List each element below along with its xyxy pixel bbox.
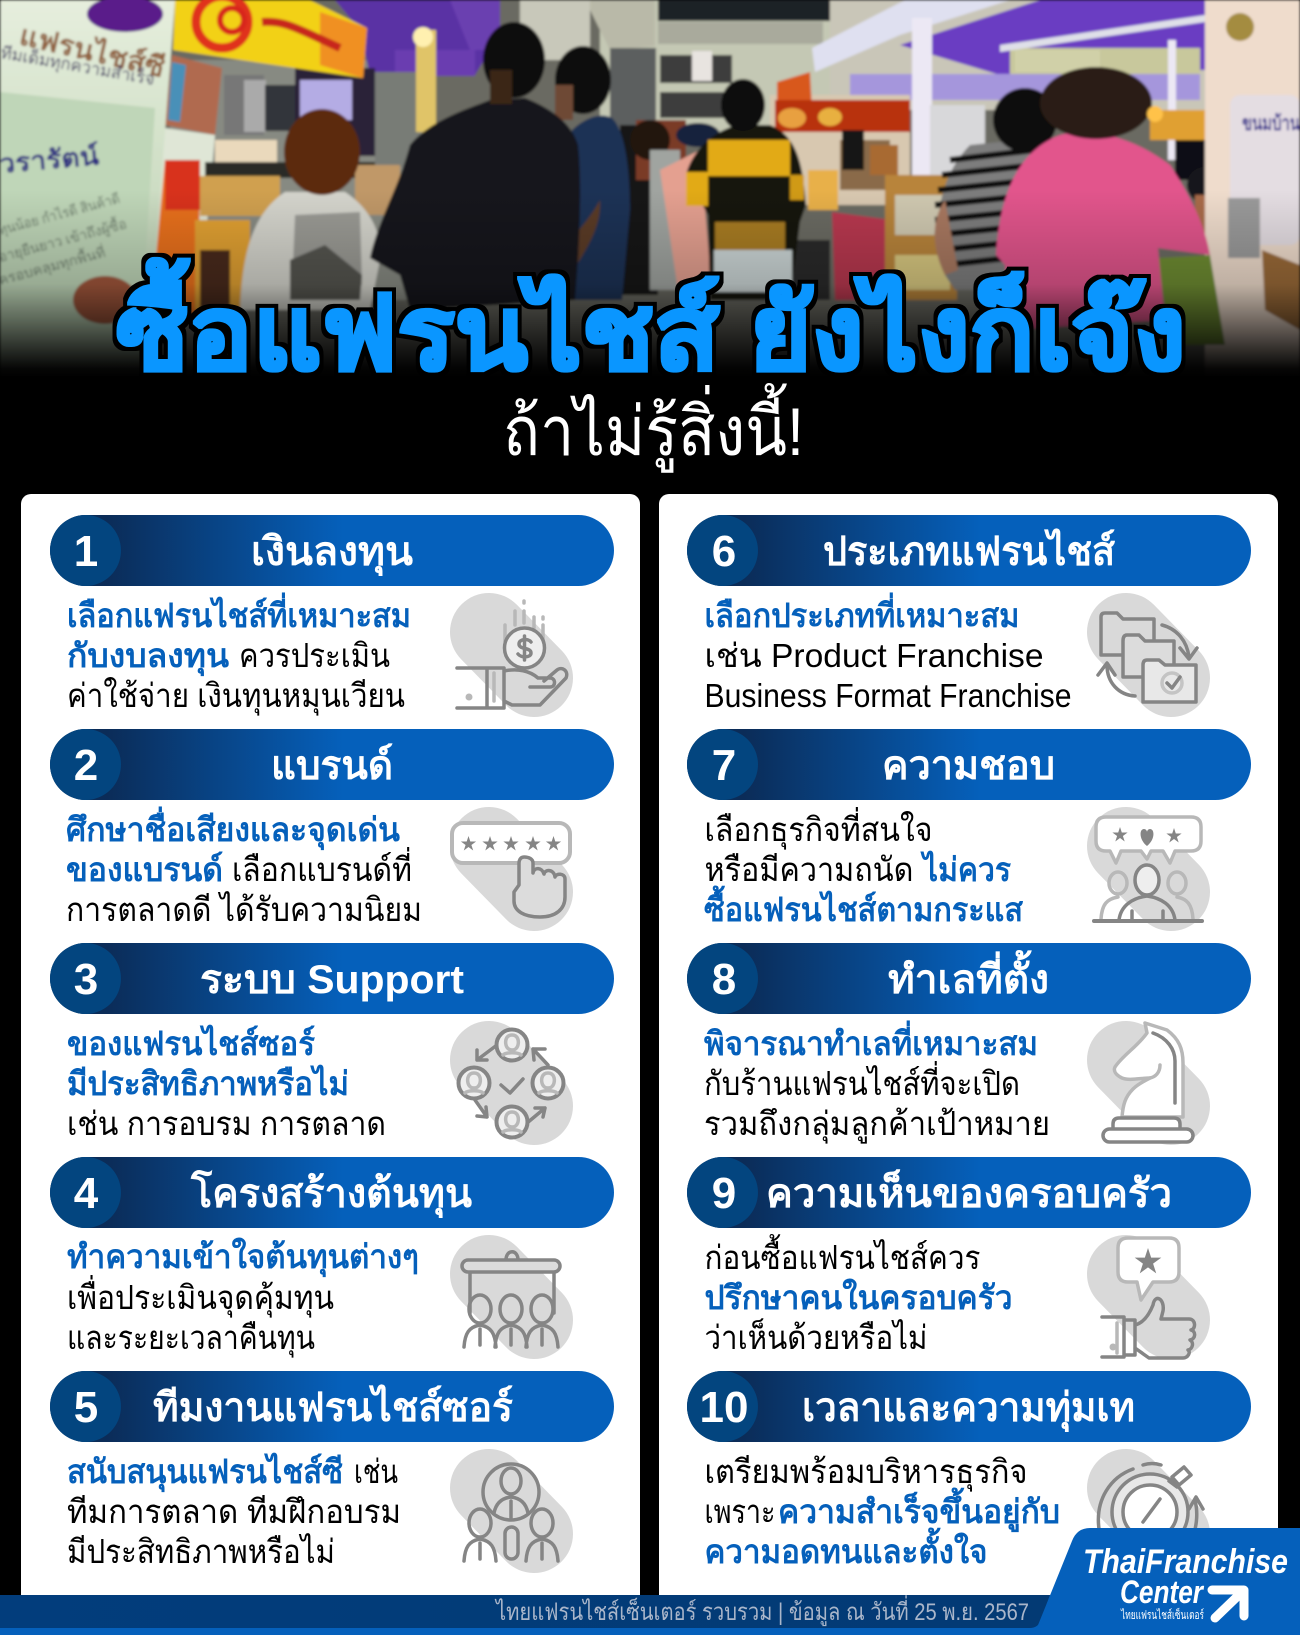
photo: franchise expo crowd [0,0,1300,380]
header bar 9 [687,1157,1251,1228]
photo: franchise expo crowd: ทีมเด็มทุกความสำเร็จ [0,41,157,90]
icon: speech bubble and group [1094,817,1202,921]
footer source text: ไทยแฟรนไชส์เซ็นเตอร์ รวบรวม | ข้อมูล ณ วันที่ 25 พ.ย. 2567 [494,1595,1029,1627]
body text 7 [704,807,1024,928]
header bar 8: 8 [712,955,736,1004]
header bar 1: เงินลงทุน [251,530,413,577]
cream banner right [1205,0,1300,380]
icon: stopwatch [1098,1464,1203,1550]
striped shirt person [938,138,1040,290]
photo: franchise expo crowd: แฟรนไชส์ซี [17,19,168,83]
header bar 9: ความเห็นของครอบครัว [766,1168,1172,1216]
body text 1: ค่าใช้จ่าย เงินทุนหมุนเวียน [67,677,405,716]
body text 9: ก่อนซื้อแฟรนไชส์ควร [704,1234,980,1276]
yellow sign [173,0,367,78]
body text 5: สนับสนุนแฟรนไชส์ซี [67,1452,343,1493]
body text 4 [67,1237,419,1358]
body text 3: ของแฟรนไชส์ซอร์ [67,1024,315,1062]
item 6: franchise type [687,515,1251,714]
body text 3: มีประสิทธิภาพหรือไม่ [67,1064,349,1102]
header bar 6: ประเภทแฟรนไชส์ [823,528,1116,574]
body text 4: ทำความเข้าใจต้นทุนต่างๆ [67,1237,419,1278]
mint banner left [0,0,175,380]
man in black suit [370,98,580,310]
header bar 4: โครงสร้างต้นทุน [190,1170,472,1219]
item 3: support [50,943,614,1142]
icon: people cycle with check [458,1030,564,1138]
body text 9: ว่าเห็นด้วยหรือไม่ [704,1318,928,1356]
body text 8: กับร้านแฟรนไชส์ที่จะเปิด [704,1061,1020,1102]
woman [240,192,381,310]
item 5: franchisor team [50,1371,614,1570]
pink shirt person [1158,255,1225,345]
body text 9 [704,1234,1012,1356]
body text 6: เช่น Product Franchise [704,637,1044,674]
body text 2 [66,806,422,928]
body text 1 [67,592,411,716]
footer bar [0,1595,1300,1635]
header bar 7: ความชอบ [882,744,1055,788]
header bar 2: 2 [74,741,98,790]
body text 5: เช่น [354,1453,398,1490]
body text 10: เพราะ [704,1493,776,1530]
header bar 10: เวลาและความทุ่มเท [802,1386,1135,1433]
icon: magnifier on team [464,1464,558,1561]
header bar 5 [50,1371,614,1442]
purple right stalls [830,0,1205,110]
photo: franchise expo crowd: อายุยืนยาว เข้าถึงผู้ซื้อ [0,213,129,266]
center hall [600,0,900,140]
header bar 6: 6 [712,527,736,576]
header bar 3: 3 [74,955,98,1004]
body text 4: เพื่อประเมินจุดคุ้มทุน [67,1275,334,1318]
header bar 1: 1 [74,527,98,576]
body text 8 [704,1020,1050,1144]
body text 5: ทีมการตลาด ทีมฝึกอบรม [67,1493,401,1530]
body text 3: เช่น การอบรม การตลาด [67,1105,386,1142]
header bar 5: ทีมงานแฟรนไชส์ซอร์ [153,1384,513,1430]
panel: right column [659,494,1278,1619]
header bar 3 [50,943,614,1014]
body text 8: พิจารณาทำเลที่เหมาะสม [704,1020,1038,1062]
header bar 9: 9 [712,1169,736,1218]
photo fade to black [0,190,1300,406]
icon: chess knight [1103,1023,1193,1142]
man in yellow print shirt [686,125,806,300]
body text 4: และระยะเวลาคืนทุน [67,1319,315,1358]
body text 6: เลือกประเภทที่เหมาะสม [704,592,1020,634]
header bar 10 [687,1371,1251,1442]
body text 2: ของแบรนด์ [66,851,223,888]
photo: franchise expo crowd: ทุนน้อย กำไรดี สินค้าดี [0,190,122,239]
header bar 8: ทำเลที่ตั้ง [888,950,1049,1002]
item 9: family opinion [687,1157,1251,1358]
title: ซื้อแฟรนไชส์ ยังไงก็เจ๊ง [116,258,1186,391]
icon: presentation board and audience [462,1252,560,1347]
back right details [1175,130,1220,180]
header bar 2: แบรนด์ [271,743,393,788]
body text 1: ควรประเมิน [239,637,390,674]
body text 2: ศึกษาชื่อเสียงและจุดเด่น [66,806,400,851]
header bar 3: ระบบ Support [200,958,464,1002]
body text 6: Business Format Franchise [704,677,1072,714]
icon: logo arrow [1212,1590,1244,1618]
left stall [170,60,430,300]
header bar 4: 4 [74,1169,99,1218]
logo: ThaiFranchise Center [1034,1528,1300,1635]
header bar 7 [687,729,1251,800]
panel: left column [21,494,640,1619]
body text 2: เลือกแบรนด์ที่ [232,847,412,888]
subtitle: ถ้าไม่รู้สิ่งนี้! [503,383,804,473]
body text 7: ซื้อแฟรนไชส์ตามกระแส [704,885,1024,928]
item 10: time and dedication [687,1371,1251,1570]
body text 9: ปรึกษาคนในครอบครัว [704,1278,1012,1316]
body text 1: เลือกแฟรนไชส์ที่เหมาะสม [67,592,411,634]
body text 6 [704,592,1072,714]
header bar 2 [50,729,614,800]
logo: ThaiFranchise Center: ไทยแฟรนไชส์เซ็นเตอร์ [1120,1607,1204,1622]
body text 7: ไม่ควร [920,850,1011,888]
food stall center [770,95,910,205]
body text 10: ความอดทนและตั้งใจ [704,1527,988,1570]
logo: ThaiFranchise Center: Center [1120,1574,1204,1610]
body text 2: การตลาดดี ได้รับความนิยม [66,891,422,928]
header bar 6 [687,515,1251,586]
icon: folders with cycle arrows [1098,613,1197,702]
body text 5 [67,1452,401,1570]
item 2: brand [50,729,614,928]
body text 5: มีประสิทธิภาพหรือไม่ [67,1533,335,1570]
header bar 5: 5 [74,1383,98,1432]
crowd behind [620,125,658,295]
man in blue shirt [570,116,630,300]
body text 10 [704,1453,1060,1570]
item 4: cost structure [50,1157,614,1358]
header bar 10: 10 [700,1383,748,1432]
icon: rating stars with pointer [452,823,570,917]
body text 8: รวมถึงกลุ่มลูกค้าเป้าหมาย [704,1105,1050,1144]
posters and pillar [165,55,222,135]
header bar 7: 7 [712,741,736,790]
body text 7: หรือมีความถนัด [704,851,914,888]
body text 1: กับงบลงทุน [67,637,229,677]
item 7: passion [687,729,1251,928]
header bar 4 [50,1157,614,1228]
header bar 8 [687,943,1251,1014]
icon: star bubble and thumbs up [1102,1238,1195,1358]
icon: hand with coin [457,601,567,708]
body text 10: เตรียมพร้อมบริหารธุรกิจ [704,1453,1028,1492]
body text 7: เลือกธุรกิจที่สนใจ [704,807,932,850]
counter and food [215,140,277,164]
item 8: location [687,943,1251,1144]
item 1: investment [50,515,614,716]
body text 3 [67,1024,386,1142]
header bar 1 [50,515,614,586]
photo: franchise expo crowd: วรารัตน์ [0,140,100,179]
body text 10: ความสำเร็จขึ้นอยู่กับ [778,1487,1060,1533]
